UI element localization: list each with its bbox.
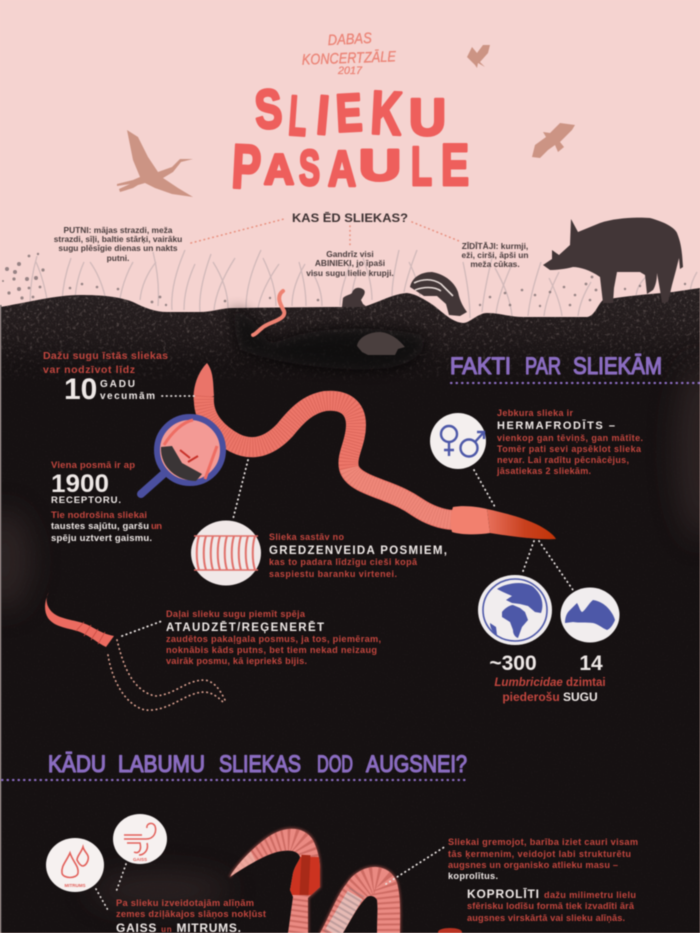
text: regeneration: ATAUDZĒT/REĢENERĒT	[166, 622, 324, 634]
main title: U	[409, 89, 446, 147]
text: coprolites	[467, 887, 636, 923]
text: lifespan: var nodzīvot līdz	[43, 364, 135, 376]
icon: air	[113, 814, 167, 864]
main title: U	[359, 141, 401, 190]
text: mammals	[461, 241, 529, 269]
text: species: piederošu SUGU	[502, 690, 598, 704]
text: lifespan: Dažu sugu īstās sliekas	[43, 350, 168, 362]
text: amphibians: ABINIEKI, jo īpaši	[315, 258, 385, 268]
text: receptors: Viena posmā ir ap	[51, 460, 135, 471]
text: digestion: tās ķermenim, veidojot labi strukturētu	[448, 849, 631, 859]
text: hermaphrodite: vienkop gan tēviņš, gan mātīte.	[497, 433, 643, 443]
main title: E	[335, 83, 364, 144]
dotted line to regeneration	[122, 621, 162, 636]
main title	[230, 77, 469, 203]
text: mammals: meža cūkas.	[470, 259, 520, 269]
worm clitellum	[451, 506, 490, 534]
text: air and moisture: Pa slieku izveidotajām alīņām	[116, 898, 254, 908]
text: regeneration: zaudētos pakaļgala posmus, ja tos, piemēram,	[166, 634, 381, 644]
sky background	[0, 0, 700, 340]
text: ring segments: kas to padara līdzīgu cieši kopā	[269, 557, 418, 567]
text: receptors: RECEPTORU.	[51, 495, 121, 506]
heading: facts	[450, 353, 662, 380]
ground	[0, 288, 700, 933]
event title: KONCERTZĀLE	[302, 48, 397, 69]
text: hermaphrodite: nevar. Lai radītu pēcnācējus,	[497, 455, 629, 465]
text: lifespan: GADU	[100, 379, 135, 390]
text: ring segments	[269, 532, 447, 579]
text: regeneration	[166, 609, 381, 666]
icon: regenerating worm	[45, 592, 114, 647]
text: receptors: spēju uztvert gaismu.	[51, 533, 152, 544]
text: birds: strazdi, sīļi, baltie stārķi, vairāku	[54, 234, 182, 244]
text: air and moisture	[116, 898, 266, 933]
dotted lines from icons	[96, 864, 126, 912]
text: hermaphrodite: HERMAFRODĪTS –	[497, 420, 615, 432]
worm tail tip	[487, 509, 556, 539]
text: species: Lumbricidae dzimtai	[494, 677, 606, 689]
main title: S	[299, 140, 320, 196]
text: digestion: Sliekai gremojot, barība iziet cauri visam	[448, 837, 638, 847]
main title: I	[314, 84, 332, 146]
blob at bottom	[438, 928, 462, 933]
main title: P	[230, 132, 263, 203]
text: hermaphrodite: Jebkura slieka ir	[497, 408, 573, 418]
icon: male female symbols	[430, 413, 486, 469]
text: birds: sugu plēsīgie dienas un nakts	[58, 243, 178, 253]
heading: facts: PAR	[525, 353, 561, 380]
icon: globe	[478, 575, 552, 645]
dotted line to rings	[233, 460, 248, 519]
event title: 2017	[337, 65, 363, 77]
text: mammals: ZĪDĪTĀJI: kurmji,	[462, 241, 528, 251]
text: coprolites: dažu milimetru lielu	[544, 890, 636, 900]
event title: DABAS	[327, 30, 372, 49]
dotted rule benefits	[2, 779, 467, 781]
text: lifespan: 10	[64, 373, 97, 406]
dotted line lifespan	[162, 395, 194, 397]
heading: benefits: LABUMU	[118, 751, 205, 778]
event title	[302, 30, 397, 77]
text: ring segments: GREDZENVEIDA POSMIEM,	[269, 545, 447, 557]
text: air and moisture: zemes dziļākajos slāņos nokļūst	[116, 909, 266, 919]
text: regeneration: Daļai slieku sugu piemīt spēja	[166, 609, 306, 619]
dotted connectors to predators	[191, 219, 459, 246]
text: receptors: un	[151, 521, 162, 532]
icon: moisture	[46, 838, 104, 892]
icon: small worm on surface	[253, 291, 284, 335]
icon: frog	[342, 288, 367, 307]
scattered seed heads	[2, 253, 686, 307]
main title: E	[441, 133, 469, 198]
question heading: KAS ĒD SLIEKAS?	[292, 211, 408, 225]
main title: A	[264, 146, 294, 194]
icon: small bird	[467, 45, 490, 68]
icon: moisture: MITRUMS	[64, 883, 86, 888]
text: receptors: Tie nodrošina sliekai	[51, 510, 147, 521]
second big worm glow	[230, 829, 400, 933]
text: ring segments: Slieka sastāv no	[269, 532, 344, 542]
numbers: species	[489, 652, 603, 675]
lighter soil patches at page edges	[0, 360, 700, 906]
icon: heron	[117, 130, 193, 197]
text: digestion	[448, 837, 638, 881]
icon: magnifying glass	[141, 417, 223, 494]
main title: L	[287, 83, 309, 148]
icon: Latvia map	[560, 588, 620, 642]
dotted lines from tail	[474, 470, 573, 590]
icon: badger	[410, 272, 467, 316]
numbers: species: ~300	[489, 652, 537, 675]
dotted rule facts	[451, 382, 700, 384]
icon: wild boar	[543, 218, 683, 303]
second big worm	[225, 825, 403, 933]
text: receptors: taustes sajūtu, garšu	[51, 521, 149, 532]
text: birds: PUTNI: mājas strazdi, meža	[64, 225, 173, 235]
main title: L	[411, 135, 432, 197]
heading: benefits: KĀDU	[48, 751, 106, 778]
dotted outline of lost tail	[108, 640, 225, 710]
text: coprolites: KOPROLĪTI	[467, 887, 539, 901]
main title: S	[253, 77, 284, 141]
grass silhouettes	[30, 250, 697, 318]
icon: air: GAISS	[133, 857, 147, 862]
text: hermaphrodite: Tomēr pati sevi apsēklot slieka	[497, 444, 642, 454]
text: coprolites: sfērisku lodīšu formā tiek izvadīti ārā	[467, 901, 635, 911]
main title: A	[328, 141, 356, 197]
heading: benefits	[48, 751, 467, 778]
text: amphibians	[306, 249, 394, 278]
text: mammals: eži, cirši, āpši un	[461, 250, 529, 260]
ground speckle texture	[1, 290, 700, 380]
text: amphibians: visu sugu lielie krupji.	[306, 268, 394, 278]
heading: benefits: SLIEKAS	[219, 751, 301, 778]
text: receptors	[51, 460, 162, 544]
text: lifespan	[43, 350, 168, 406]
text: digestion: augsnes un organisko atlieku masu –	[448, 860, 618, 870]
text: birds: putni.	[107, 253, 129, 263]
text: hermaphrodite	[496, 408, 643, 476]
dark soil shadow under the surface	[233, 309, 425, 370]
text: coprolites: augsnes virskārtā vai slieku alīņās.	[467, 913, 625, 923]
numbers: species: 14	[579, 652, 603, 675]
text: regeneration: vairāk posmu, kā iepriekš bijis.	[166, 656, 307, 666]
text: digestion: koprolītus.	[448, 871, 498, 881]
main title: K	[369, 78, 404, 148]
heading: facts: SLIEKĀM	[573, 353, 662, 380]
icon: ring segments circle	[191, 520, 261, 586]
heading: benefits: AUGSNEI?	[366, 751, 467, 778]
icon: eagle	[532, 123, 575, 158]
text: regeneration: noknābis kāds putns, bet tiem nekad neizaug	[166, 645, 377, 655]
dotted line to digestion text	[386, 846, 446, 884]
text: birds	[54, 225, 182, 263]
icon: hedgehog	[357, 332, 405, 355]
left edge strip	[0, 305, 2, 933]
text: receptors: 1900	[51, 470, 109, 498]
text: amphibians: Gandrīz visi	[326, 249, 374, 259]
text: hermaphrodite: jāsatiekas 2 sliekām.	[496, 466, 591, 476]
text: species	[494, 677, 606, 704]
text: ring segments: saspiestu baranku virtenei.	[269, 569, 397, 579]
text: lifespan: vecumām	[100, 391, 155, 402]
big worm	[194, 363, 556, 539]
heading: benefits: DOD	[317, 751, 353, 778]
heading: facts: FAKTI	[450, 353, 511, 380]
